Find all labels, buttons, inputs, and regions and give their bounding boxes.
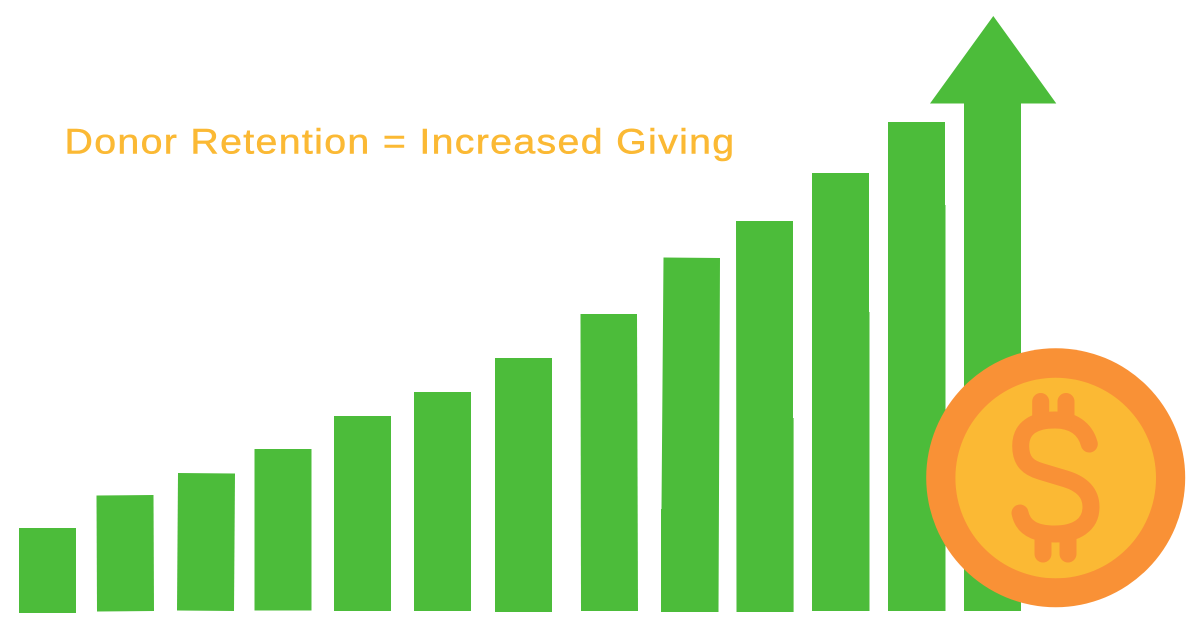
bar 5 xyxy=(334,416,391,611)
coin outer ring xyxy=(926,348,1185,607)
title: Donor Retention = Increased Giving xyxy=(64,122,736,162)
dollar sign xyxy=(1020,402,1091,554)
bar 1 xyxy=(19,528,76,613)
coin inner face xyxy=(955,378,1156,578)
bar 10 xyxy=(736,221,794,612)
icon: dollar coin xyxy=(926,348,1185,607)
bar 4 xyxy=(254,449,312,610)
bar 12 xyxy=(888,122,946,611)
arrow: upward growth arrow xyxy=(930,16,1056,611)
bar 8 xyxy=(580,314,638,611)
bar 6 xyxy=(414,392,471,611)
bar 7 xyxy=(495,358,552,612)
bar 9 xyxy=(661,258,720,612)
bar 3 xyxy=(177,473,235,611)
bar 11 xyxy=(812,173,870,611)
bar 2 xyxy=(96,495,154,612)
